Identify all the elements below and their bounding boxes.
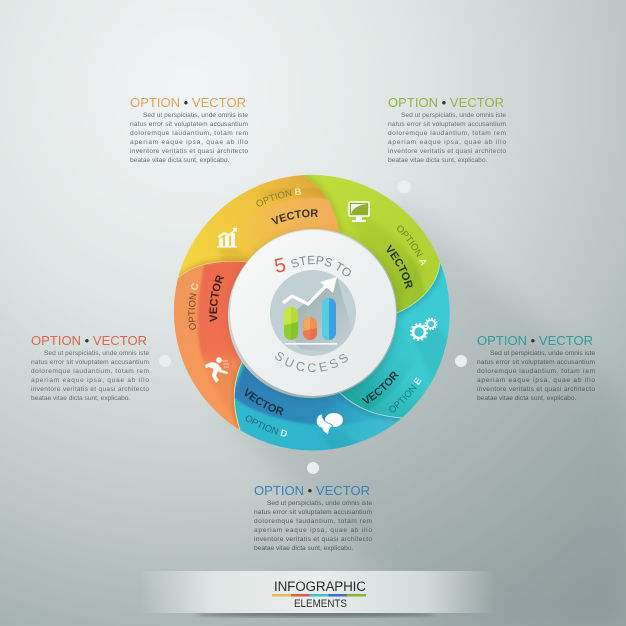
text block: option teal right: doloremque laudantium, totam rem xyxy=(477,368,596,375)
text block: option red left xyxy=(31,333,150,402)
label: vector D: VECTOR xyxy=(244,388,284,416)
text block: option blue bottom: beatae vitae dicta sunt, explicabo. xyxy=(254,545,354,552)
text block: option teal right: aperiam eaque ipsa, quae ab illo xyxy=(477,377,595,384)
wheel xyxy=(174,175,470,460)
text block: option orange top left: Sed ut perspiciatis, unde omnis iste xyxy=(143,112,248,119)
icon: bar chart with arrow xyxy=(217,228,237,248)
text block: option teal right: beatae vitae dicta sunt, explicabo. xyxy=(477,395,577,402)
text block: option orange top left: aperiam eaque ipsa, quae ab illo xyxy=(130,139,248,146)
segment: green option A xyxy=(303,174,440,313)
bar: orange xyxy=(303,317,317,340)
text block: option red left: OPTION • VECTOR xyxy=(31,333,147,348)
text block: option green top right: beatae vitae dicta sunt, explicabo. xyxy=(388,157,488,164)
text block: option blue bottom: doloremque laudantium, totam rem xyxy=(254,518,372,525)
text block: option blue bottom xyxy=(254,483,372,552)
text block: option orange top left: natus error sit voluptatem accusantium xyxy=(130,121,248,128)
icon: monitor xyxy=(349,202,369,222)
center text: 5: 5 xyxy=(272,254,288,278)
center circle xyxy=(226,227,402,402)
text block: option orange top left: OPTION • VECTOR xyxy=(130,95,246,110)
text block: option green top right: Sed ut perspiciatis, unde omnis iste xyxy=(401,112,506,119)
label: vector C: VECTOR xyxy=(209,275,224,322)
text block: option blue bottom: OPTION • VECTOR xyxy=(254,483,370,498)
arrow xyxy=(283,283,329,304)
banner title: INFOGRAPHIC xyxy=(274,579,366,594)
label: option E: OPTION E xyxy=(389,377,422,412)
center text: steps to: STEPS TO xyxy=(291,256,351,276)
text block: option blue bottom: inventore veritatis et quasi architecto xyxy=(254,536,372,543)
text block: option red left: inventore veritatis et quasi architecto xyxy=(31,386,149,393)
bar: blue xyxy=(322,298,336,340)
segment: orange option C xyxy=(174,261,247,430)
text block: option red left: doloremque laudantium, totam rem xyxy=(31,368,150,375)
text block: option green top right: inventore veritatis et quasi architecto xyxy=(388,148,506,155)
text block: option teal right: natus error sit voluptatem accusantium xyxy=(477,359,596,366)
label: vector B: VECTOR xyxy=(270,209,318,224)
text block: option green top right: natus error sit voluptatem accusantium xyxy=(388,121,506,128)
text block: option red left: Sed ut perspiciatis, unde omnis iste xyxy=(44,350,149,357)
text block: option red left: aperiam eaque ipsa, quae ab illo xyxy=(31,377,149,384)
banner subtitle: ELEMENTS xyxy=(294,598,347,610)
text block: option blue bottom: Sed ut perspiciatis, unde omnis iste xyxy=(267,500,372,507)
wheel long shadow xyxy=(220,200,626,626)
text block: option green top right: doloremque laudantium, totam rem xyxy=(388,130,506,137)
text block: option green top right: aperiam eaque ipsa, quae ab illo xyxy=(388,139,506,146)
text block: option teal right: inventore veritatis et quasi architecto xyxy=(477,386,595,393)
connector dots xyxy=(159,180,467,474)
text block: option blue bottom: natus error sit voluptatem accusantium xyxy=(254,509,372,516)
rainbow bar xyxy=(272,594,366,596)
text block: option red left: natus error sit voluptatem accusantium xyxy=(31,359,150,366)
icon: gears xyxy=(411,318,436,340)
segment: yellow option B xyxy=(178,175,340,278)
segment: blue option D xyxy=(234,362,402,450)
text block: option teal right: OPTION • VECTOR xyxy=(477,333,593,348)
icon: running man xyxy=(205,357,229,382)
label: vector E: VECTOR xyxy=(362,372,399,404)
segment: teal option E xyxy=(340,262,450,418)
text block: option green top right xyxy=(388,95,506,164)
icon: speech bubbles xyxy=(316,413,343,435)
text block: option teal right xyxy=(477,333,596,402)
text block: option orange top left: beatae vitae dicta sunt, explicabo. xyxy=(130,157,230,164)
center text: success: SUCCESS xyxy=(275,352,348,372)
text block: option blue bottom: aperiam eaque ipsa, quae ab illo xyxy=(254,527,372,534)
text block: option red left: beatae vitae dicta sunt, explicabo. xyxy=(31,395,131,402)
label: option B: OPTION B xyxy=(256,188,302,206)
bottom banner xyxy=(140,571,495,616)
label: option A: OPTION A xyxy=(397,226,426,266)
text block: option orange top left xyxy=(130,95,248,164)
text block: option green top right: OPTION • VECTOR xyxy=(388,95,504,110)
label: vector A: VECTOR xyxy=(386,244,412,289)
bar: green xyxy=(284,307,298,340)
text block: option orange top left: inventore veritatis et quasi architecto xyxy=(130,148,248,155)
label: option D: OPTION D xyxy=(246,415,287,436)
arrow head xyxy=(320,277,337,293)
text block: option orange top left: doloremque laudantium, totam rem xyxy=(130,130,248,137)
text block: option teal right: Sed ut perspiciatis, unde omnis iste xyxy=(490,350,595,357)
label: option C: OPTION C xyxy=(188,283,198,330)
chart long shadow xyxy=(284,277,352,352)
baseline xyxy=(285,343,337,345)
center disk xyxy=(270,270,356,356)
